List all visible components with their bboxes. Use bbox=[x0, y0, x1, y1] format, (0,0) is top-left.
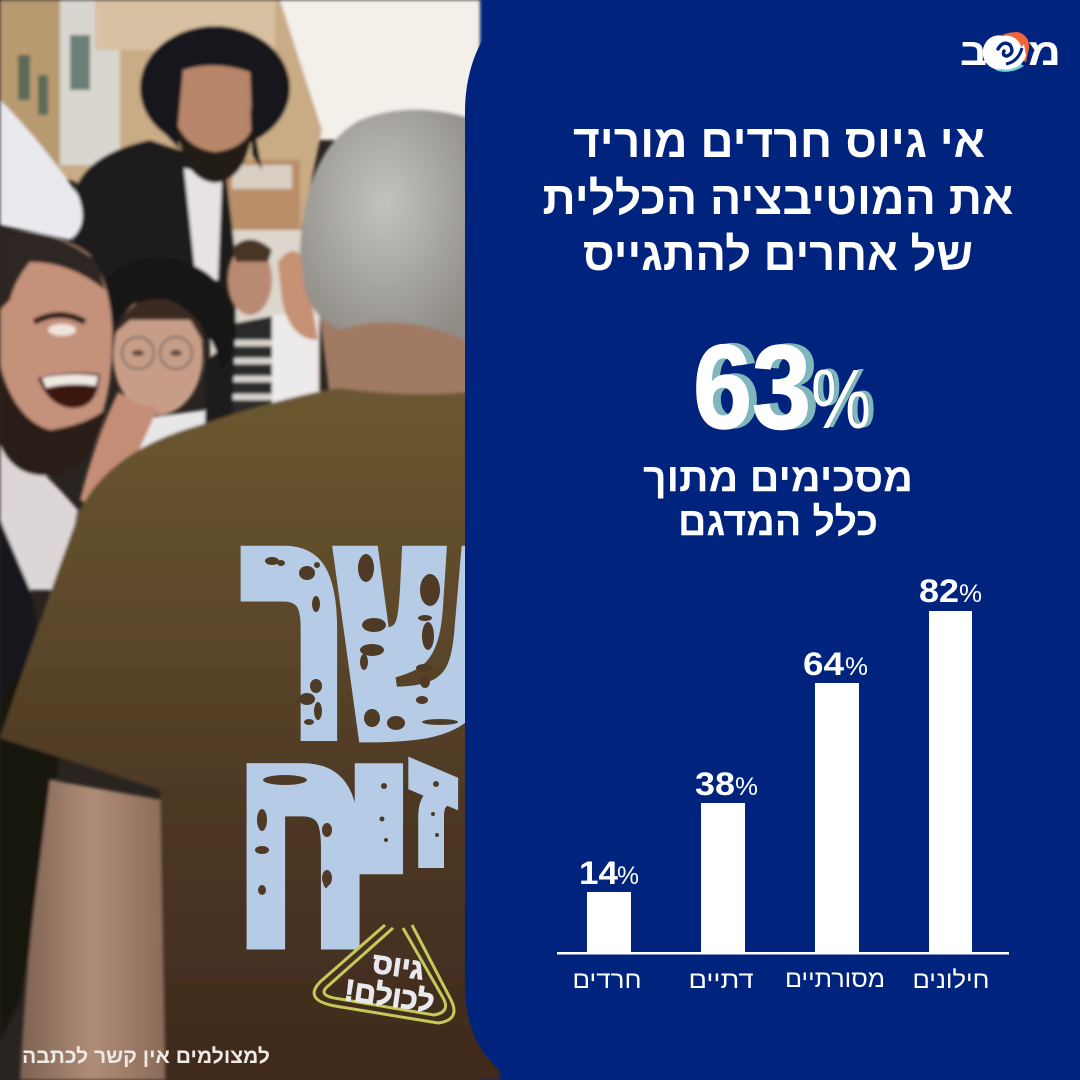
photo: grey hair bbox=[300, 109, 470, 342]
big number: 63%: 63 bbox=[693, 321, 811, 454]
value labels: % bbox=[959, 580, 982, 608]
bar: traditional 64% bbox=[815, 683, 859, 953]
big number: 63%: 63 bbox=[701, 320, 819, 453]
bar: religious 38% bbox=[701, 803, 745, 953]
logo: mashav bbox=[960, 32, 1061, 74]
shirt slogan: large stencil letters bbox=[240, 546, 465, 950]
category labels: מסורתיים bbox=[785, 966, 885, 993]
shirt logo: army-for-all triangle: גיוס bbox=[370, 948, 426, 987]
big number: 63%: % bbox=[816, 351, 876, 445]
big number: 63%: % bbox=[811, 352, 871, 446]
logo: mashav: מ bbox=[1028, 32, 1061, 74]
category labels: דתיים bbox=[688, 967, 754, 994]
value labels bbox=[579, 573, 982, 891]
photo: grey-haired man's neck bbox=[318, 300, 470, 410]
title: של אחרים להתגייס bbox=[583, 228, 973, 280]
title: את המוטיבציה הכללית bbox=[542, 172, 1014, 224]
value labels: 38 bbox=[695, 766, 735, 802]
shirt slogan: large stencil letters: ש bbox=[336, 473, 506, 791]
subtitle bbox=[643, 456, 913, 544]
photo: boy in striped shirt bbox=[225, 239, 317, 418]
shirt logo: army-for-all triangle: לכולם! bbox=[342, 974, 436, 1019]
logo: mashav: ב bbox=[960, 32, 987, 74]
title: אי גיוס חרדים מוריד bbox=[573, 115, 985, 167]
panel: navy background bbox=[465, 0, 1080, 1080]
subtitle: מסכימים מתוך bbox=[643, 456, 913, 500]
shirt logo: army-for-all triangle bbox=[314, 925, 454, 1023]
shirt slogan: large stencil letters: ז bbox=[410, 721, 455, 895]
shirt slogan: large stencil letters: ח bbox=[238, 693, 367, 998]
photo: arm bbox=[20, 780, 165, 1080]
value labels: 82 bbox=[919, 573, 959, 609]
shirt slogan: worn print speckles bbox=[255, 554, 458, 895]
photo: protest street scene bbox=[0, 0, 506, 1080]
shirt slogan: large stencil letters: ר bbox=[244, 473, 344, 792]
photo: white sleeve at upper left bbox=[0, 100, 82, 240]
value labels: % bbox=[617, 862, 639, 890]
category labels bbox=[572, 966, 990, 994]
subtitle: כלל המדגם bbox=[678, 500, 878, 544]
category labels: חרדים bbox=[572, 967, 642, 994]
bar: Haredim 14% bbox=[587, 892, 631, 953]
value labels: % bbox=[845, 653, 868, 681]
value labels: % bbox=[735, 773, 758, 801]
category labels: חילונים bbox=[912, 967, 990, 994]
title bbox=[542, 115, 1014, 280]
photo: man in black hat standing above bbox=[72, 26, 290, 340]
bar: secular 82% bbox=[929, 611, 972, 953]
value labels: 14 bbox=[579, 855, 618, 891]
photo: shouting bearded man bbox=[0, 233, 158, 720]
axis baseline bbox=[557, 952, 1009, 954]
shirt slogan: large stencil letters: ו bbox=[344, 722, 414, 903]
value labels: 64 bbox=[803, 646, 844, 682]
photo credit note: למצולמים אין קשר לכתבה bbox=[22, 1045, 270, 1068]
bar chart bbox=[557, 573, 1009, 994]
photo: olive t-shirt bbox=[0, 388, 470, 1080]
photo: boy in black hat and glasses bbox=[102, 257, 236, 450]
photo: dark foreground figure at far left bbox=[0, 660, 60, 1040]
